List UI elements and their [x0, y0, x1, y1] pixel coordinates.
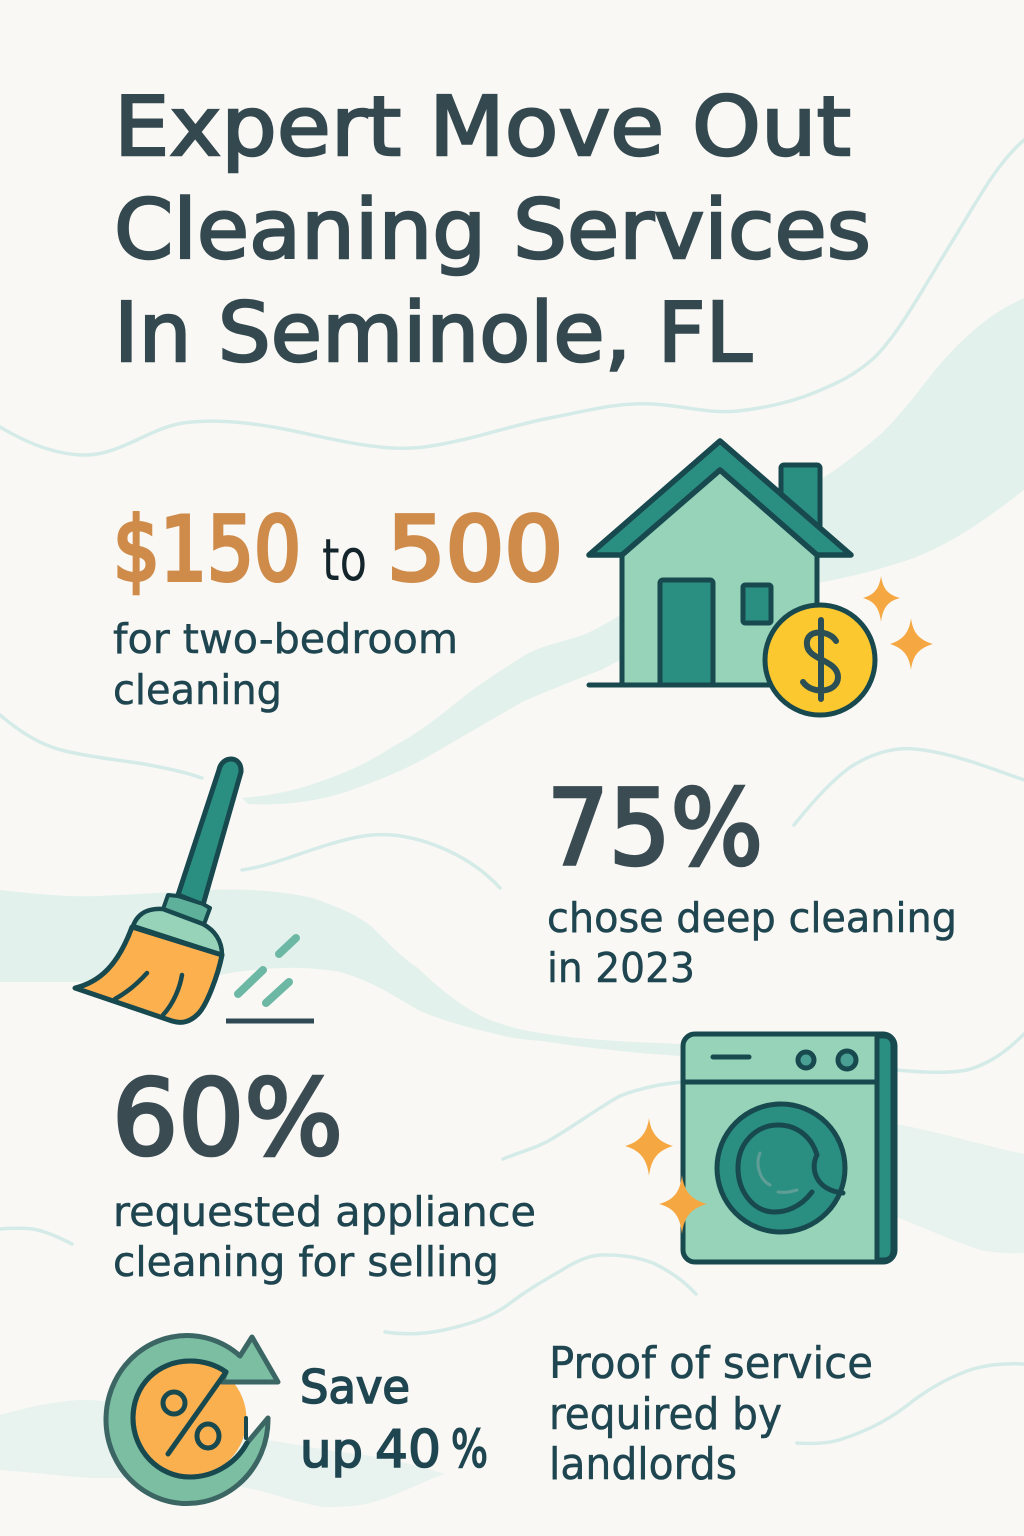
price range: $150 [113, 498, 301, 601]
60% description [113, 1188, 536, 1286]
75% description: chose deep cleaning [547, 894, 957, 942]
icon: house with dollar coin [589, 441, 933, 715]
60% description: cleaning for selling [113, 1238, 499, 1286]
stat: price range for two-bedroom cleaning [113, 498, 563, 714]
stat: 60% requested appliance cleaning [112, 1057, 536, 1286]
proof of service note: landlords [549, 1439, 737, 1490]
savings text: Save [300, 1360, 410, 1414]
proof of service note: required by [549, 1389, 782, 1440]
icon: broom [75, 759, 314, 1022]
title: In Seminole, FL [114, 286, 752, 381]
savings text: % [451, 1420, 488, 1480]
price description: cleaning [113, 666, 282, 714]
icon: washing machine [625, 1034, 895, 1262]
price range: 500 [387, 498, 563, 601]
75% figure: 75% [547, 767, 763, 889]
title: Cleaning Services [114, 183, 871, 278]
savings text: up [300, 1423, 363, 1479]
price range [113, 498, 563, 601]
price description: for two-bedroom [113, 615, 458, 663]
price description [113, 615, 458, 714]
75% description: in 2023 [547, 944, 695, 992]
price range: to [322, 526, 367, 594]
savings text: 40 [375, 1420, 441, 1480]
proof of service note [549, 1338, 873, 1490]
title [114, 80, 871, 381]
stat: 75% chose deep cleaning [547, 767, 957, 992]
title: Expert Move Out [114, 80, 851, 175]
60% figure: 60% [112, 1057, 343, 1179]
icon: percent savings arrow [106, 1336, 278, 1504]
75% description [547, 894, 957, 992]
proof of service note: Proof of service [549, 1338, 873, 1389]
savings text [300, 1360, 488, 1480]
60% description: requested appliance [113, 1188, 536, 1236]
